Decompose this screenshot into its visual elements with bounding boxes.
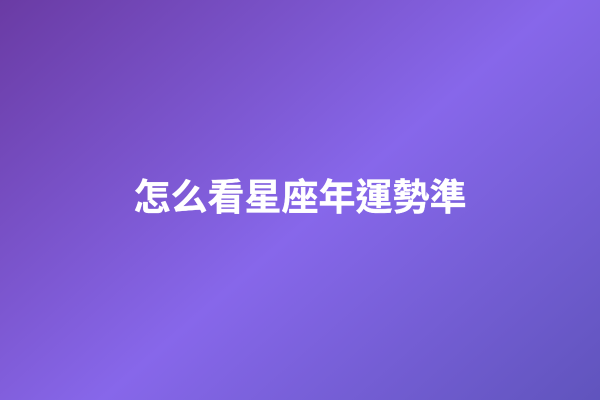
- title: 怎么看星座年運勢準: [134, 177, 466, 218]
